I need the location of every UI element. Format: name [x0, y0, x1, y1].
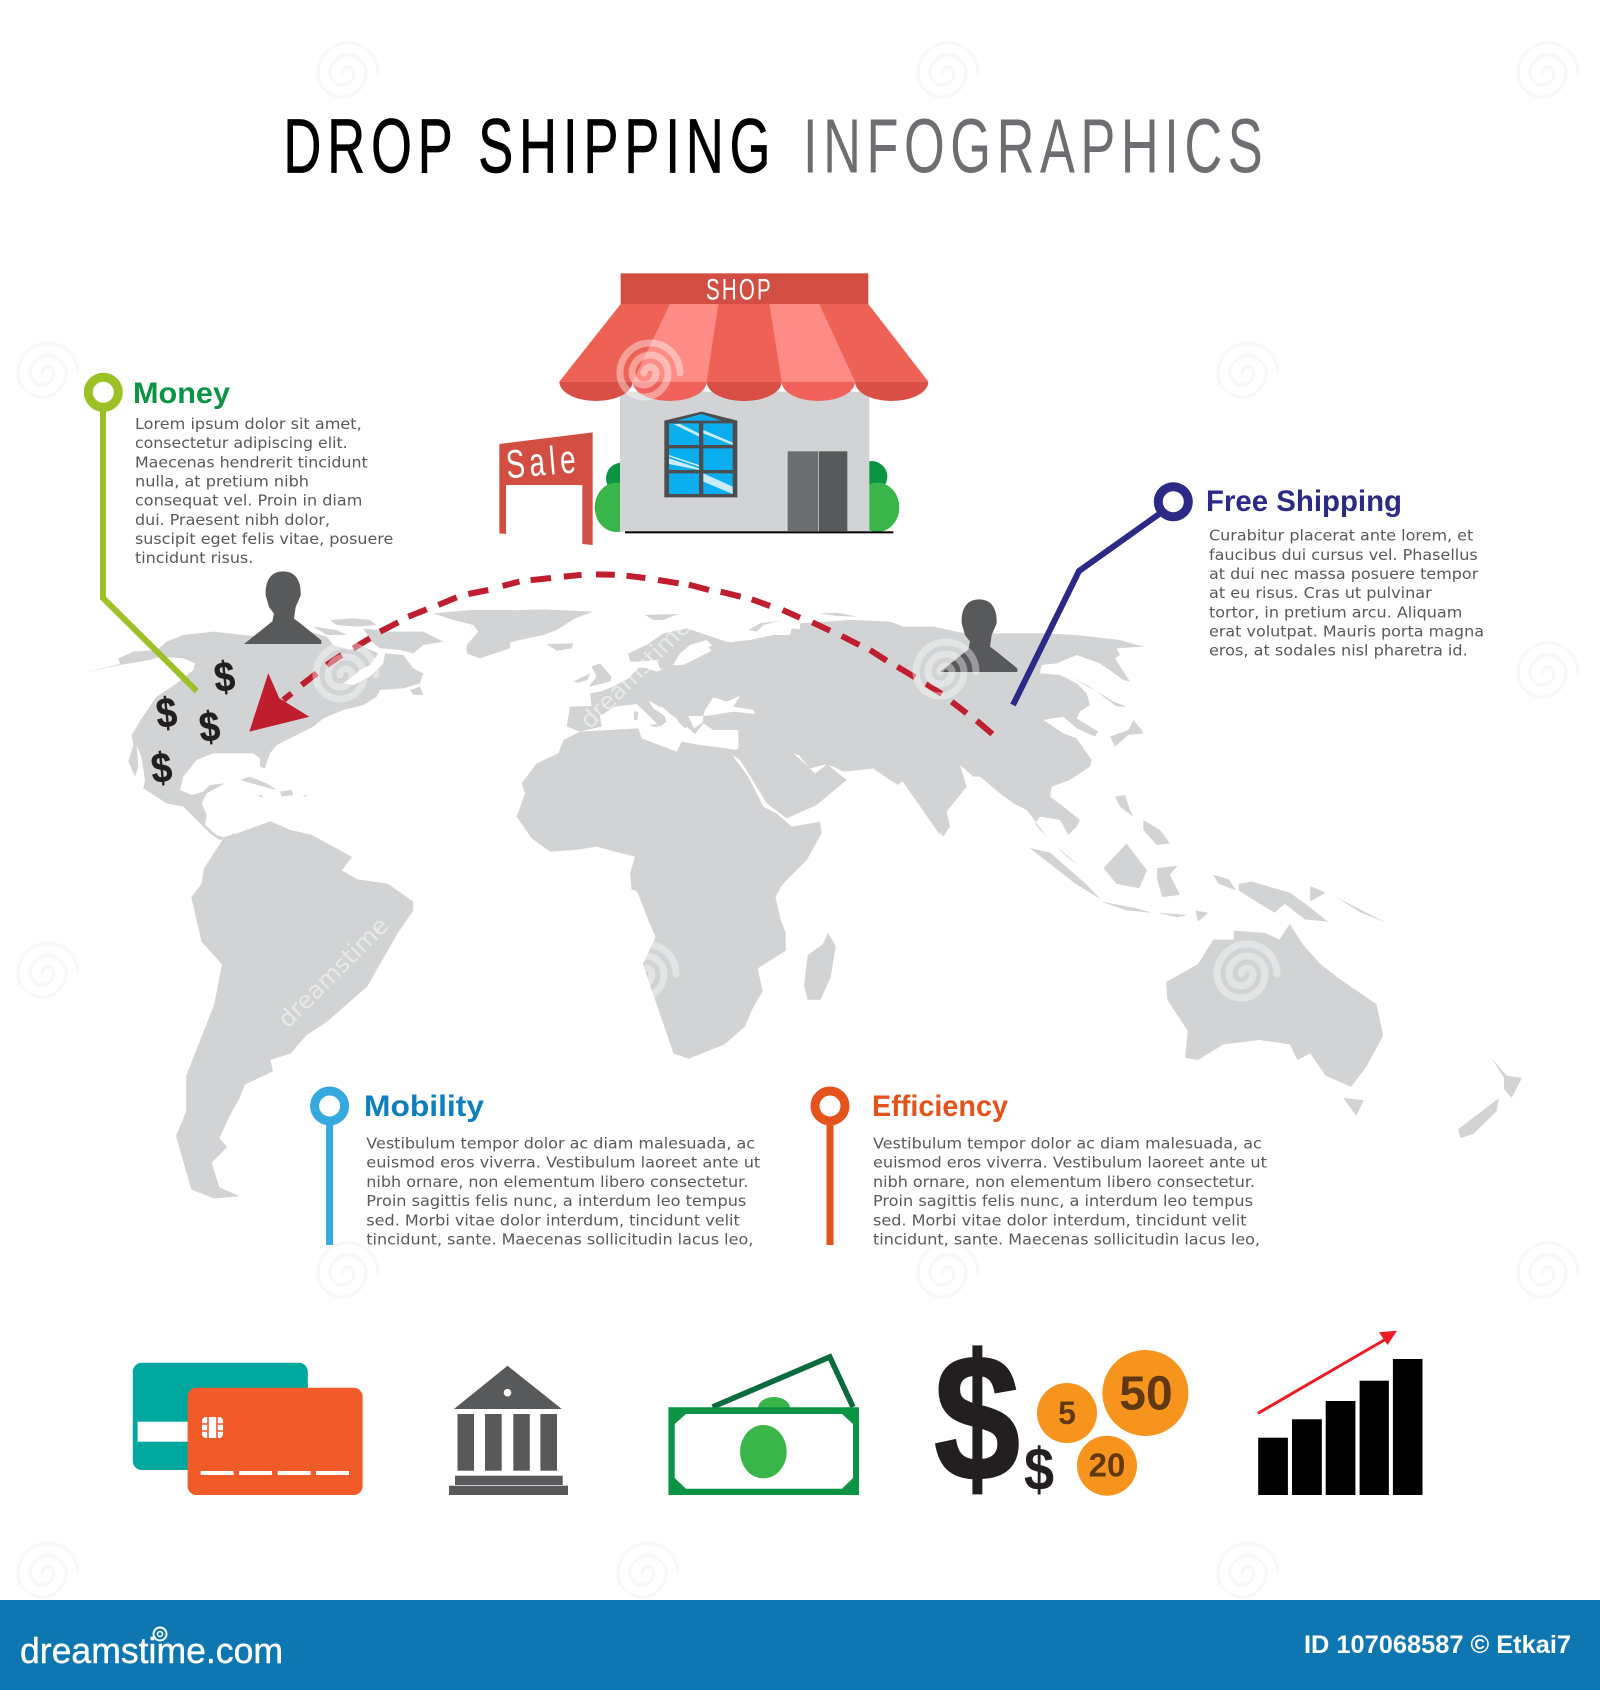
callout: mobility: nibh ornare, non elementum libero consectetur. [366, 1173, 748, 1191]
icon: dollars and coins [934, 1317, 1188, 1519]
callout: free shipping: erat volutpat. Mauris porta magna [1209, 622, 1484, 640]
callout: mobility: Proin sagittis felis nunc, a interdum leo tempus [366, 1192, 746, 1210]
icon: shop [499, 273, 928, 545]
icon: growth bar chart [1258, 1331, 1422, 1495]
icon: dollars and coins: 50 [1119, 1367, 1173, 1420]
icon: person in asia [940, 599, 1017, 672]
callout: mobility: tincidunt, sante. Maecenas sollicitudin lacus leo, [366, 1230, 753, 1248]
dollar signs on map [149, 653, 237, 793]
callout: money: Maecenas hendrerit tincidunt [135, 453, 368, 471]
shop wall [620, 392, 869, 532]
dollar signs on map: $ [149, 744, 174, 793]
icon: bank [449, 1366, 568, 1495]
callout: free shipping: eros, at sodales nisl pharetra id. [1209, 642, 1468, 660]
callout: money: consectetur adipiscing elit. [135, 434, 348, 452]
title: INFOGRAPHICS [803, 102, 1263, 189]
south america and southern africa [176, 821, 786, 1198]
callout: free shipping: at eu risus. Cras ut pulvinar [1209, 584, 1432, 602]
shop door [788, 451, 847, 532]
north america [85, 610, 510, 840]
callout: free shipping [1013, 485, 1484, 705]
callout: money: consequat vel. Proin in diam [135, 492, 362, 510]
callout: mobility: sed. Morbi vitae dolor interdum, tincidunt velit [366, 1211, 740, 1229]
callout: efficiency: nibh ornare, non elementum libero consectetur. [873, 1173, 1255, 1191]
footer bar [0, 1600, 1600, 1690]
callout: money: dui. Praesent nibh dolor, [135, 511, 330, 529]
shop sign [621, 273, 868, 306]
callout: free shipping: tortor, in pretium arcu. Aliquam [1209, 603, 1462, 621]
watermark text over map: dreamstime [574, 613, 696, 734]
callout: mobility: Mobility [364, 1090, 484, 1123]
east asia [800, 620, 1170, 865]
callout: efficiency [815, 1090, 1267, 1248]
callout: free shipping: at dui nec massa posuere tempor [1209, 565, 1479, 583]
callout: money: Money [133, 377, 230, 410]
callout: mobility: Vestibulum tempor dolor ac diam malesuada, ac [366, 1134, 755, 1152]
footer bar: dreamstime.com [20, 1630, 283, 1671]
icon: dollars and coins: 5 [1058, 1395, 1076, 1431]
shop sign: SHOP [706, 274, 771, 306]
southeast asia and oceania [804, 844, 1522, 1138]
callout: money: suscipit eget felis vitae, posuere [135, 530, 393, 548]
icon: dollars and coins: $ [934, 1317, 1020, 1519]
callout: money: tincidunt risus. [135, 549, 253, 567]
dollar signs on map: $ [197, 703, 222, 752]
shop window [664, 412, 737, 497]
callout: money: Lorem ipsum dolor sit amet, [135, 415, 362, 433]
dollar signs on map: $ [212, 653, 237, 702]
callout: efficiency: sed. Morbi vitae dolor interdum, tincidunt velit [873, 1211, 1246, 1229]
icon: dollars and coins: 20 [1089, 1447, 1125, 1484]
callout: efficiency: Efficiency [872, 1090, 1008, 1123]
sale sign [499, 432, 593, 545]
callout: efficiency: euismod eros viverra. Vestibulum laoreet ante ut [873, 1154, 1267, 1172]
africa, europe and western asia [500, 609, 940, 890]
callout: free shipping: faucibus dui cursus vel. Phasellus [1209, 546, 1478, 564]
callout: free shipping: Curabitur placerat ante lorem, et [1209, 527, 1473, 545]
icon: dollars and coins: $ [1024, 1436, 1054, 1504]
callout: efficiency: Proin sagittis felis nunc, a interdum leo tempus [873, 1192, 1253, 1210]
callout: money: nulla, at pretium nibh [135, 472, 309, 490]
footer bar: ID 107068587 © Etkai7 [1304, 1631, 1571, 1659]
callout: money [88, 377, 393, 691]
title: DROP SHIPPING [284, 102, 770, 189]
callout: free shipping: Free Shipping [1206, 485, 1402, 518]
icon: person in north america [244, 571, 321, 644]
icon: credit cards [133, 1363, 363, 1495]
dollar signs on map: $ [154, 689, 179, 738]
awning [559, 304, 928, 401]
icon: banknotes [668, 1357, 859, 1495]
world map [85, 609, 1522, 1198]
callout: efficiency: tincidunt, sante. Maecenas sollicitudin lacus leo, [873, 1230, 1260, 1248]
callout: efficiency: Vestibulum tempor dolor ac diam malesuada, ac [873, 1134, 1262, 1152]
callout: mobility [315, 1090, 760, 1248]
watermark text over map [272, 613, 696, 1033]
sale sign: Sale [504, 438, 577, 488]
dashed shipping route arrow [249, 574, 992, 734]
watermark spirals over artwork [316, 343, 1277, 998]
bushes [595, 461, 899, 532]
callout: mobility: euismod eros viverra. Vestibulum laoreet ante ut [366, 1154, 760, 1172]
title [284, 102, 1263, 189]
watermark text over map: dreamstime [272, 912, 394, 1033]
